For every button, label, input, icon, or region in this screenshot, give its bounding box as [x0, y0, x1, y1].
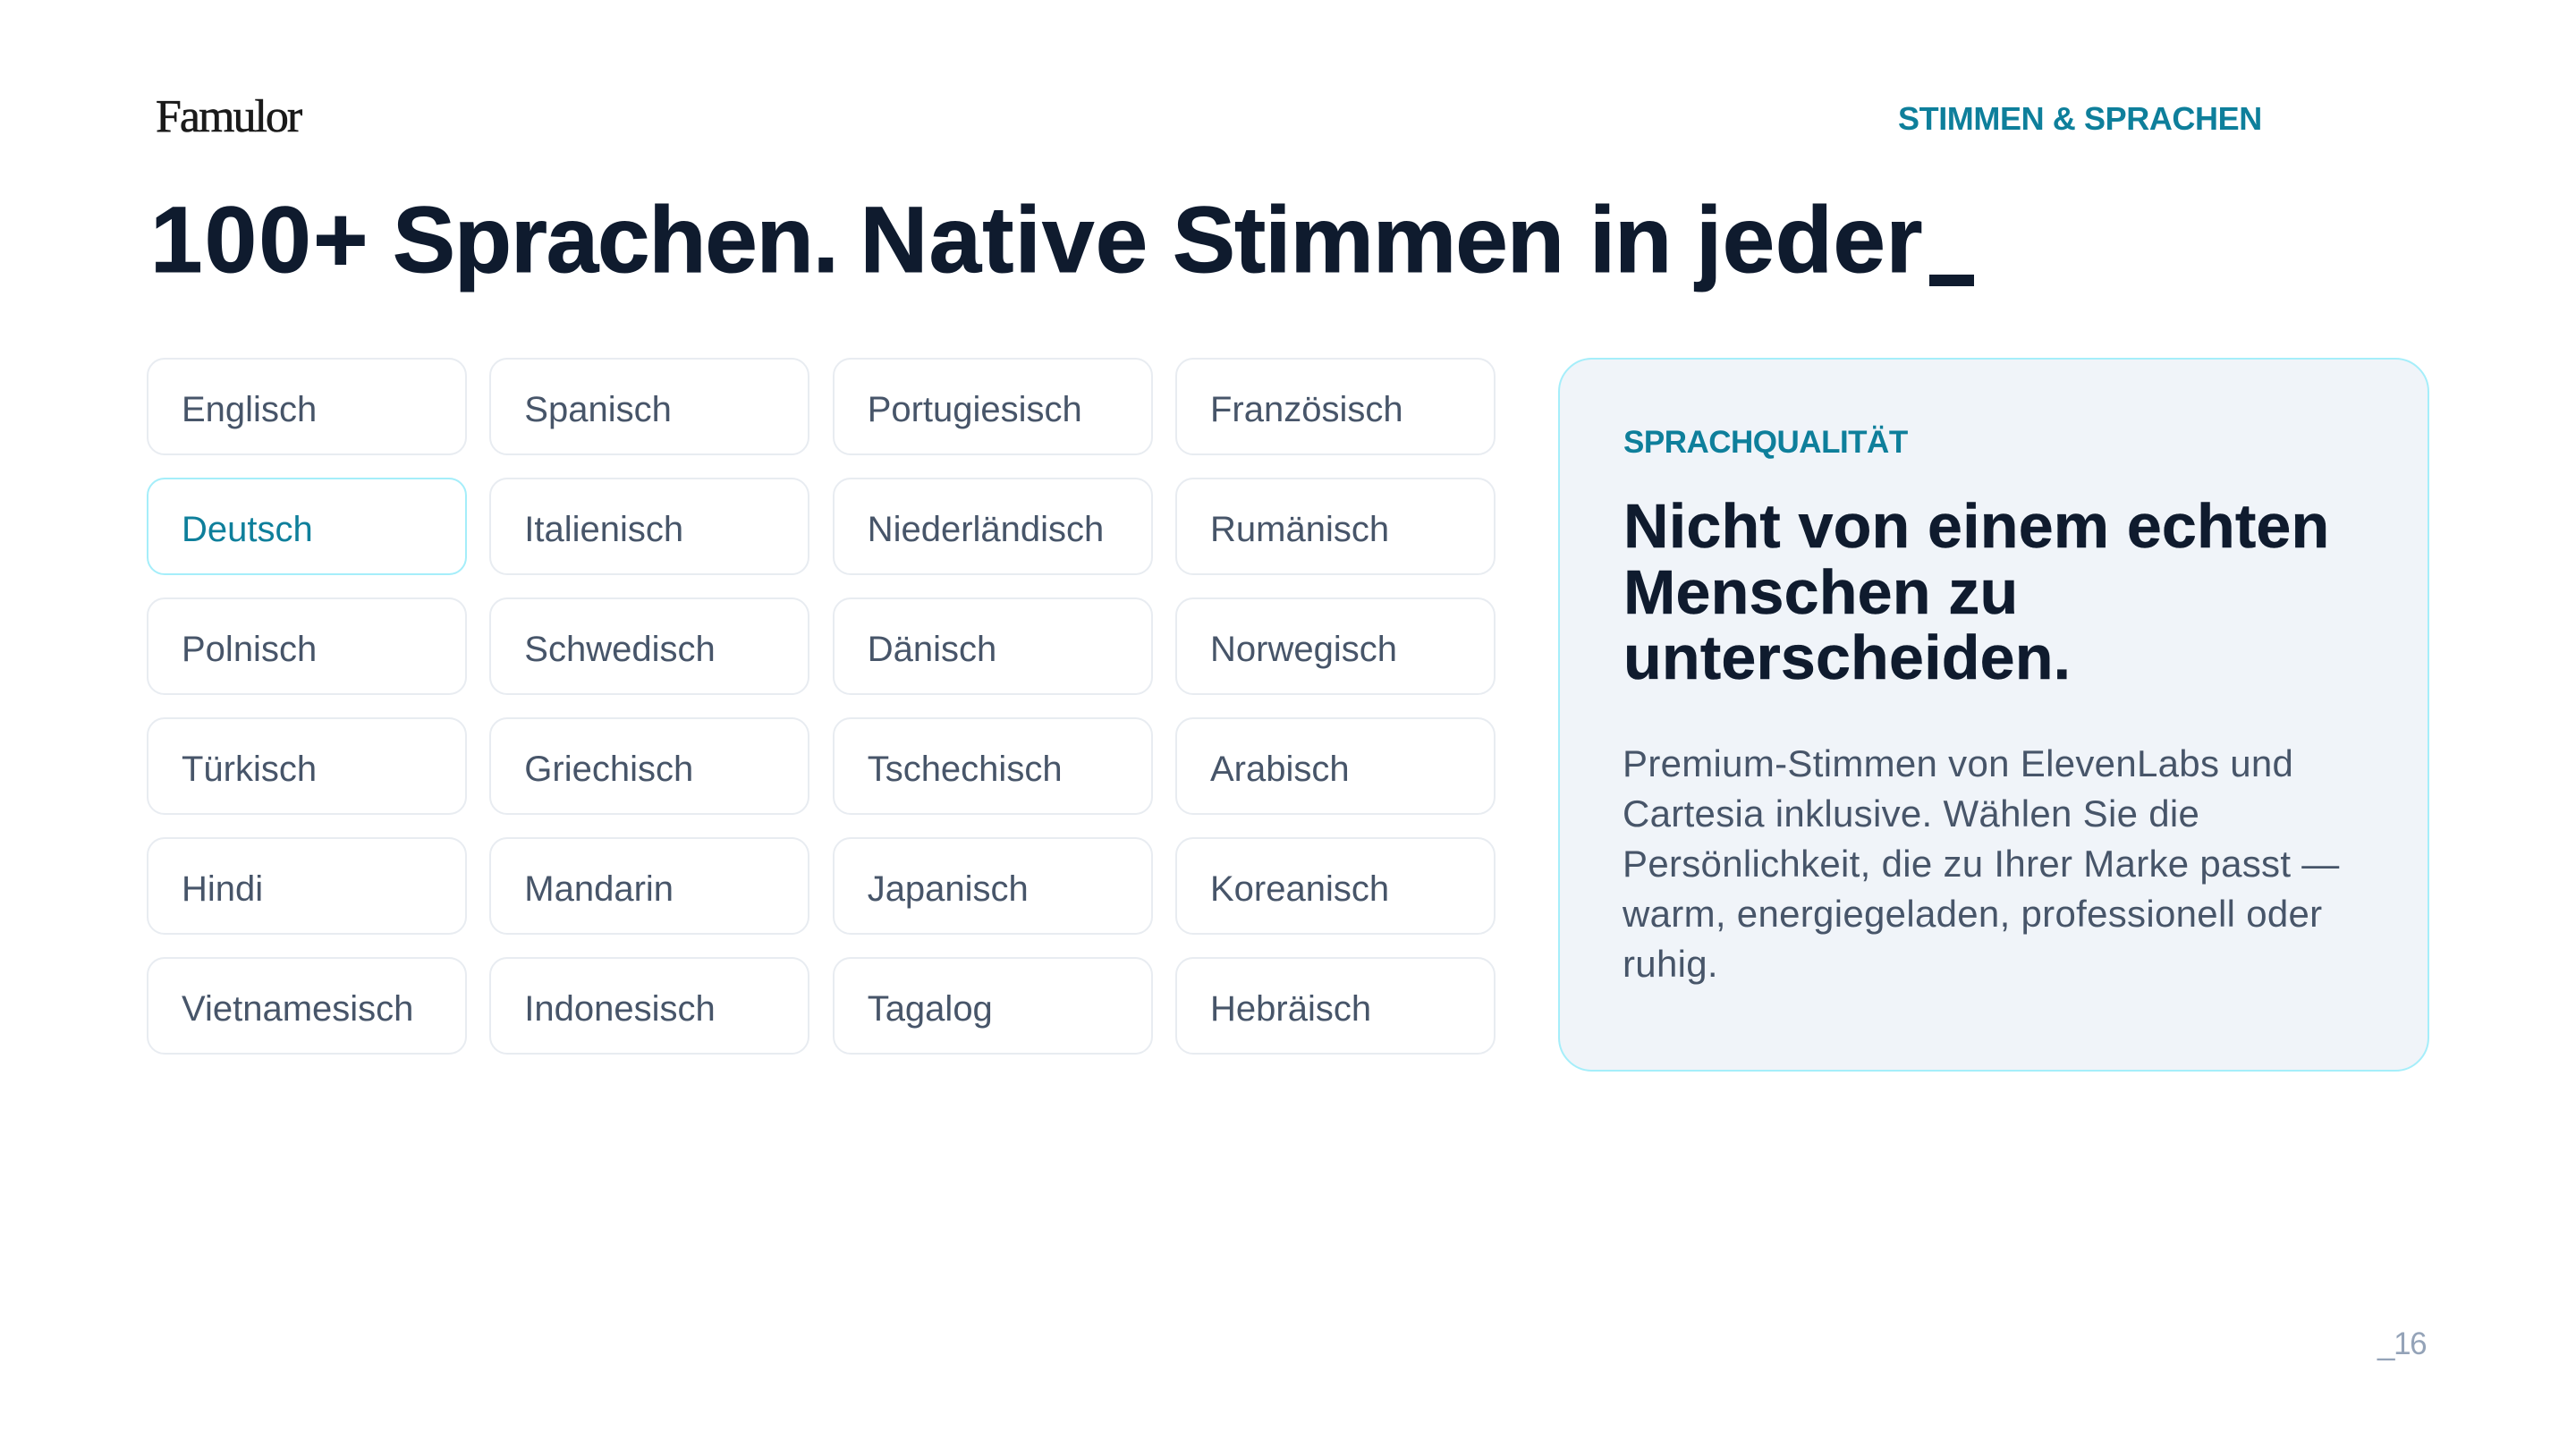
language: Spanisch: [489, 358, 809, 455]
language: Hindi: [147, 837, 467, 935]
title: Native: [860, 188, 1148, 292]
language: Türkisch: [147, 717, 467, 815]
language: Japanisch: Japanisch: [868, 869, 1029, 909]
language: Rumänisch: [1175, 478, 1496, 575]
language: Niederländisch: [833, 478, 1153, 575]
language: Italienisch: [489, 478, 809, 575]
language: Schwedisch: [489, 597, 809, 695]
panel heading: [1623, 491, 2329, 692]
language: Arabisch: Arabisch: [1210, 750, 1350, 789]
panel body text: Cartesia inklusive. Wählen Sie die: [1623, 792, 2199, 835]
language: Deutsch (highlighted): [147, 478, 467, 575]
language: Polnisch: Polnisch: [182, 630, 317, 669]
language: Japanisch: [833, 837, 1153, 935]
panel body text: Persönlichkeit, die zu Ihrer Marke passt —: [1623, 843, 2340, 885]
title: Sprachen.: [393, 188, 838, 292]
language: Französisch: [1175, 358, 1496, 455]
language: Vietnamesisch: [147, 957, 467, 1055]
panel heading: Nicht von einem echten: [1623, 491, 2329, 561]
language: Dänisch: Dänisch: [868, 630, 996, 669]
language: Deutsch (highlighted): Deutsch: [182, 510, 313, 549]
panel body text: [1623, 742, 2340, 985]
panel label: SPRACHQUALITÄT: [1623, 425, 1908, 460]
language: Französisch: Französisch: [1210, 390, 1403, 429]
panel body text: ruhig.: [1623, 943, 1718, 985]
language: Mandarin: Mandarin: [524, 869, 674, 909]
language: Dänisch: [833, 597, 1153, 695]
language: Koreanisch: Koreanisch: [1210, 869, 1389, 909]
language: Hindi: Hindi: [182, 869, 263, 909]
language: Griechisch: Griechisch: [524, 750, 693, 789]
language: Arabisch: [1175, 717, 1496, 815]
language: Niederländisch: Niederländisch: [868, 510, 1104, 549]
title: jeder: [1696, 188, 1923, 292]
language: Norwegisch: Norwegisch: [1210, 630, 1397, 669]
language: Polnisch: [147, 597, 467, 695]
language: Tagalog: [833, 957, 1153, 1055]
language: Vietnamesisch: Vietnamesisch: [182, 989, 413, 1029]
language: Tagalog: Tagalog: [868, 989, 993, 1029]
title: in: [1589, 188, 1671, 292]
language grid: [147, 358, 1496, 1055]
language: Tschechisch: Tschechisch: [868, 750, 1063, 789]
title: [150, 188, 1974, 292]
language: Mandarin: [489, 837, 809, 935]
language: Schwedisch: Schwedisch: [524, 630, 716, 669]
title: 100+: [150, 188, 370, 292]
language: Norwegisch: [1175, 597, 1496, 695]
language: Hebräisch: [1175, 957, 1496, 1055]
panel heading: Menschen zu: [1623, 556, 2018, 626]
logo: Famulor: Famulor: [156, 91, 301, 142]
page number: _16: [2377, 1326, 2426, 1361]
language: Spanisch: Spanisch: [524, 390, 672, 429]
panel body text: Premium-Stimmen von ElevenLabs und: [1623, 742, 2293, 784]
language: Türkisch: Türkisch: [182, 750, 317, 789]
language: Englisch: Englisch: [182, 390, 317, 429]
language: Koreanisch: [1175, 837, 1496, 935]
language: Indonesisch: Indonesisch: [524, 989, 716, 1029]
panel body text: warm, energiegeladen, professionell oder: [1623, 893, 2322, 935]
language: Portugiesisch: Portugiesisch: [868, 390, 1082, 429]
language: Portugiesisch: [833, 358, 1153, 455]
language: Tschechisch: [833, 717, 1153, 815]
language: Italienisch: Italienisch: [524, 510, 683, 549]
panel: Sprachqualität: [1558, 358, 2429, 1072]
language: Rumänisch: Rumänisch: [1210, 510, 1389, 549]
panel heading: unterscheiden.: [1623, 623, 2071, 692]
language: Englisch: [147, 358, 467, 455]
language: Indonesisch: [489, 957, 809, 1055]
title: Stimmen: [1173, 188, 1563, 292]
language: Griechisch: [489, 717, 809, 815]
language: Hebräisch: Hebräisch: [1210, 989, 1371, 1029]
section label: STIMMEN & SPRACHEN: [1898, 100, 2262, 137]
